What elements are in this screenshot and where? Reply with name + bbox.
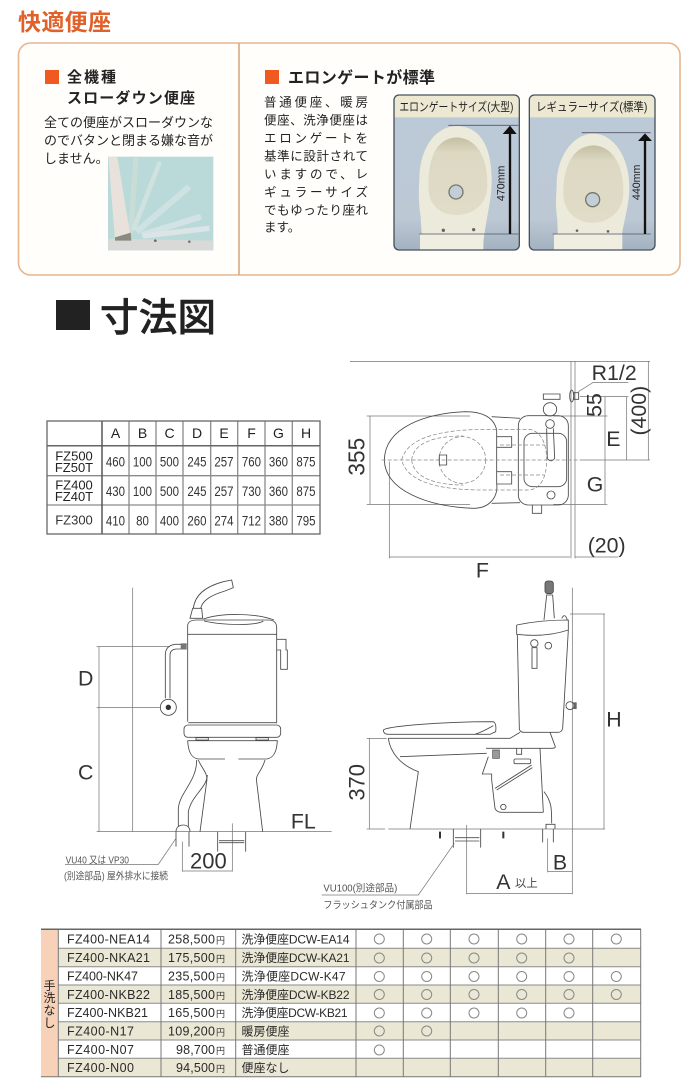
text block: slow-down description: しません。 <box>44 151 109 166</box>
table row: FZ500: 875 <box>296 455 316 470</box>
price row: FZ400-N00: FZ400-N00 <box>67 1061 134 1075</box>
table row: FZ400: 730 <box>242 484 261 499</box>
table row: FZ300: 400 <box>160 514 179 529</box>
table header: dimension letters: H <box>301 425 311 441</box>
price row: FZ400-NKA21 <box>67 951 574 965</box>
table row: FZ400: FZ40T <box>55 489 93 504</box>
table row: FZ400 <box>55 478 316 504</box>
text block: elongated description: でもゆったり座れ <box>264 204 368 218</box>
side label: 手洗なし: 手 <box>43 979 56 993</box>
label: B: B <box>553 851 567 875</box>
text block: elongated description: ます。 <box>264 220 300 234</box>
table row: FZ300: 712 <box>242 514 261 529</box>
table row: FZ400: 360 <box>269 484 288 499</box>
note: drain pipe: VU40 又は VP30 <box>66 855 129 867</box>
photo: seat closing motion <box>108 157 213 250</box>
table header: dimension letters <box>111 425 311 441</box>
price row: FZ400-NKA21: FZ400-NKA21 <box>67 951 150 965</box>
text block: elongated description: いますので、レ <box>264 168 368 182</box>
text block: slow-down description: のでバタンと閉まる嫌な音が <box>44 133 213 148</box>
note: drain parts: フラッシュタンク付属部品 <box>323 898 433 911</box>
price row: FZ400-N17: 円 <box>216 1028 225 1038</box>
table row: FZ300: 274 <box>214 514 234 529</box>
price row: FZ400-N17: 暖房便座 <box>242 1024 290 1038</box>
price row: FZ400-N07: FZ400-N07 <box>67 1043 134 1057</box>
table row: FZ500: 460 <box>106 455 125 470</box>
price row: FZ400-NKB21: FZ400-NKB21 <box>67 1006 148 1020</box>
price row: FZ400-N07: 98,700 <box>176 1043 215 1057</box>
row shading <box>58 948 641 1077</box>
panel: comfort seat features <box>18 43 680 275</box>
table row: FZ400: 257 <box>214 484 234 499</box>
label: A 以上 <box>496 870 538 894</box>
price row: FZ400-NKB21: 円 <box>216 1009 225 1019</box>
price row: FZ400-NEA14: 洗浄便座DCW-EA14 <box>242 932 350 946</box>
price row: FZ400-NKB21: 洗浄便座DCW-KB21 <box>242 1006 348 1020</box>
label: H: H <box>606 707 622 731</box>
price row: FZ400-N17: 109,200 <box>168 1024 215 1038</box>
price row: FZ400-NKB21: 165,500 <box>168 1006 215 1020</box>
heading: 寸法図 with black square: 寸法図 <box>100 297 216 340</box>
table row: FZ300: 795 <box>296 514 316 529</box>
price row: FZ400-NK47: 235,500 <box>168 970 215 984</box>
table row: FZ500 <box>55 448 316 475</box>
note: drain pipe: (別途部品) 屋外排水に接続 <box>64 869 168 882</box>
label: FL: FL <box>291 809 316 833</box>
side label: 手洗なし: し <box>43 1016 56 1030</box>
table row: FZ500: 500 <box>160 455 179 470</box>
table: dimensions by model <box>47 421 320 534</box>
price row: FZ400-NK47: FZ400-NK47 <box>67 970 138 984</box>
heading: slow-down seat: スローダウン便座 <box>67 89 195 107</box>
table row: FZ400: 245 <box>187 484 207 499</box>
table header: dimension letters: C <box>164 425 175 441</box>
side label: 手洗なし: 洗 <box>43 991 56 1005</box>
table header: dimension letters: G <box>273 425 284 441</box>
price row: FZ400-NKA21: 洗浄便座DCW-KA21 <box>242 951 350 965</box>
table header: dimension letters: F <box>247 425 256 441</box>
sub-panel: slow-down seat <box>44 68 213 250</box>
text block: elongated description: エロンゲートを <box>264 132 368 146</box>
label: E: E <box>606 427 620 451</box>
label: R1/2: R1/2 <box>592 361 637 385</box>
table row: FZ400: 500 <box>160 484 179 499</box>
table row: FZ500: 100 <box>133 455 152 470</box>
price row: FZ400-NKB22: 円 <box>216 991 225 1001</box>
price row: FZ400-NK47: 円 <box>216 972 225 982</box>
note: drain pipe <box>64 855 168 882</box>
price row: FZ400-NEA14 <box>67 932 621 946</box>
table row: FZ300: 410 <box>106 514 125 529</box>
table row: FZ400: 875 <box>296 484 316 499</box>
label: A 以上: A <box>496 870 511 894</box>
table row: FZ500: 360 <box>269 455 288 470</box>
heading: slow-down seat <box>67 68 195 107</box>
table row: FZ500: 257 <box>214 455 234 470</box>
photo: regular size bowl: 440mm <box>631 164 643 200</box>
label: 200: 200 <box>190 848 227 873</box>
table: product price list <box>41 929 641 1077</box>
side label: 手洗なし: な <box>43 1004 56 1018</box>
text block: elongated description: 基準に設計されて <box>264 148 368 164</box>
price row: FZ400-N00: 94,500 <box>176 1061 215 1075</box>
label: F: F <box>476 558 489 582</box>
price row: FZ400-N17: FZ400-N17 <box>67 1024 134 1038</box>
icon: orange square bullet <box>265 70 279 84</box>
photo: elongated size bowl <box>394 95 519 253</box>
note: drain parts: VU100(別途部品) <box>323 883 397 895</box>
label: 355: 355 <box>344 438 370 476</box>
table row: FZ400: FZ400 <box>55 478 93 492</box>
diagram: front view <box>64 580 332 882</box>
text block: elongated description: ギュラーサイズ <box>264 184 368 200</box>
table row: FZ300 <box>55 512 316 529</box>
label: A 以上: 以上 <box>515 877 538 890</box>
label: (400): (400) <box>627 386 651 436</box>
table header: dimension letters: A <box>111 425 121 441</box>
price row: FZ400-NEA14: 258,500 <box>168 932 215 946</box>
text block: elongated description: 普通便座、暖房 <box>264 96 368 110</box>
text block: slow-down description <box>44 115 213 166</box>
side label: 手洗なし <box>41 929 58 1077</box>
label: 55: 55 <box>583 393 607 417</box>
diagram: top view <box>344 361 651 582</box>
heading: elongated standard: エロンゲートが標準 <box>288 68 435 87</box>
photo: elongated size bowl: エロンゲートサイズ(大型) <box>399 99 513 114</box>
heading: slow-down seat: 全機種 <box>67 68 116 86</box>
label: C: C <box>78 761 93 785</box>
price row: FZ400-NKB22 <box>67 988 621 1002</box>
label: 370: 370 <box>345 764 370 801</box>
price row: FZ400-NKB22: 洗浄便座DCW-KB22 <box>242 988 350 1002</box>
price row: FZ400-N00: 便座なし <box>242 1061 290 1075</box>
label: D: D <box>78 667 93 691</box>
table row: FZ300: 380 <box>269 514 288 529</box>
table row: FZ500: FZ500 <box>55 448 93 464</box>
text block: elongated description <box>264 96 368 234</box>
price row: FZ400-N17 <box>67 1024 432 1038</box>
price row: FZ400-NKA21: 175,500 <box>168 951 215 965</box>
table row: FZ500: FZ50T <box>55 460 93 475</box>
table row: FZ400: 100 <box>133 484 152 499</box>
price row: FZ400-NKA21: 円 <box>216 954 225 964</box>
table row: FZ300: 260 <box>187 514 207 529</box>
table header: dimension letters: E <box>219 425 229 441</box>
diagram: side view <box>322 581 622 911</box>
price row: FZ400-NKB22: 185,500 <box>168 988 215 1002</box>
table row: FZ400: 430 <box>106 484 125 499</box>
photo: regular size bowl <box>529 95 655 253</box>
price row: FZ400-N00: 円 <box>216 1064 225 1074</box>
table header: dimension letters: B <box>138 425 147 441</box>
photo: elongated size bowl: 470mm <box>496 165 508 201</box>
sub-panel: elongated standard <box>264 68 655 253</box>
price row: FZ400-NK47 <box>67 970 621 984</box>
price row: FZ400-NEA14: 円 <box>216 936 225 946</box>
table row: FZ500: 760 <box>242 455 261 470</box>
label: (20): (20) <box>588 534 626 558</box>
table header: dimension letters: D <box>192 425 202 441</box>
price row: FZ400-NEA14: FZ400-NEA14 <box>67 932 150 946</box>
price row: FZ400-N07: 普通便座 <box>242 1043 290 1057</box>
price row: FZ400-NKB21 <box>67 1006 574 1020</box>
text block: slow-down description: 全ての便座がスローダウンな <box>44 115 213 130</box>
table row: FZ500: 245 <box>187 455 207 470</box>
photo: regular size bowl: レギュラーサイズ(標準) <box>536 99 647 114</box>
price row: FZ400-N07: 円 <box>216 1046 225 1056</box>
title: 快適便座: 快適便座 <box>18 9 111 35</box>
price row: FZ400-N00 <box>67 1061 290 1075</box>
table row: FZ300: FZ300 <box>55 512 93 528</box>
text block: elongated description: 便座、洗浄便座は <box>264 114 368 128</box>
price row: FZ400-NK47: 洗浄便座DCW-K47 <box>242 970 346 984</box>
table row: FZ300: 80 <box>136 514 149 529</box>
price row: FZ400-NKB22: FZ400-NKB22 <box>67 988 150 1002</box>
label: G: G <box>587 472 603 496</box>
price row: FZ400-N07 <box>67 1043 384 1057</box>
icon: orange square bullet <box>45 70 59 84</box>
note: drain parts <box>323 883 433 911</box>
